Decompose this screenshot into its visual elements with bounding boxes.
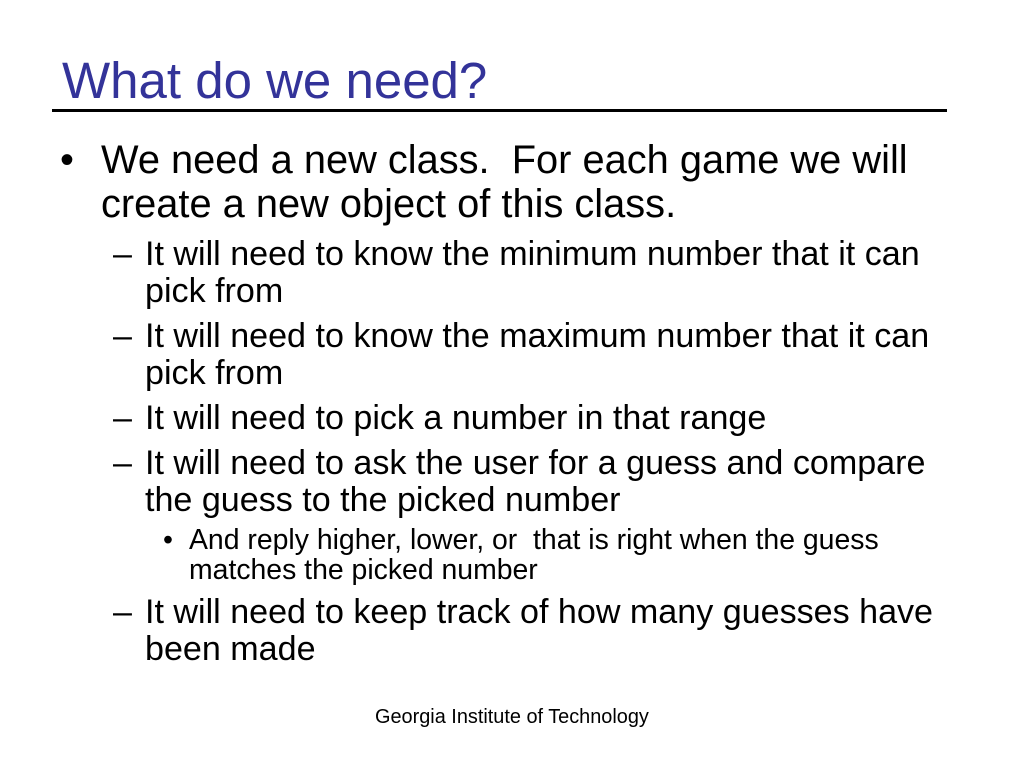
nested point: reply: And reply higher, lower, or that is right when the guess (189, 524, 879, 556)
sub point: minimum: pick from (145, 272, 283, 310)
title underline (52, 109, 947, 112)
dash: maximum: – (113, 317, 132, 355)
sub point: guess: It will need to ask the user for a guess and compare (145, 444, 925, 482)
nested bullet: • (163, 524, 173, 556)
nested point: reply (189, 524, 879, 586)
sub point: maximum: It will need to know the maximum number that it can (145, 317, 929, 355)
sub point: guess: the guess to the picked number (145, 481, 620, 519)
dash: minimum: – (113, 235, 132, 273)
main bullet text: create a new object of this class. (101, 182, 676, 226)
footer: Georgia Institute of Technology (375, 706, 649, 728)
main bullet text: We need a new class. For each game we will (101, 138, 908, 182)
sub point: guess (145, 444, 925, 519)
sub point: minimum (145, 235, 920, 310)
main bullet text (101, 138, 908, 226)
dash: pick: – (113, 399, 132, 437)
main bullet: • (60, 138, 74, 182)
nested point: reply: matches the picked number (189, 554, 538, 586)
sub point: track: It will need to keep track of how many guesses have (145, 593, 933, 631)
title: What do we need? (62, 52, 487, 109)
sub point: minimum: It will need to know the minimum number that it can (145, 235, 920, 273)
dash: guess: – (113, 444, 132, 482)
sub point: pick: It will need to pick a number in that range (145, 399, 766, 437)
dash: track: – (113, 593, 132, 631)
sub point: maximum: pick from (145, 354, 283, 392)
sub point: track (145, 593, 933, 668)
sub point: track: been made (145, 630, 316, 668)
sub point: maximum (145, 317, 929, 392)
